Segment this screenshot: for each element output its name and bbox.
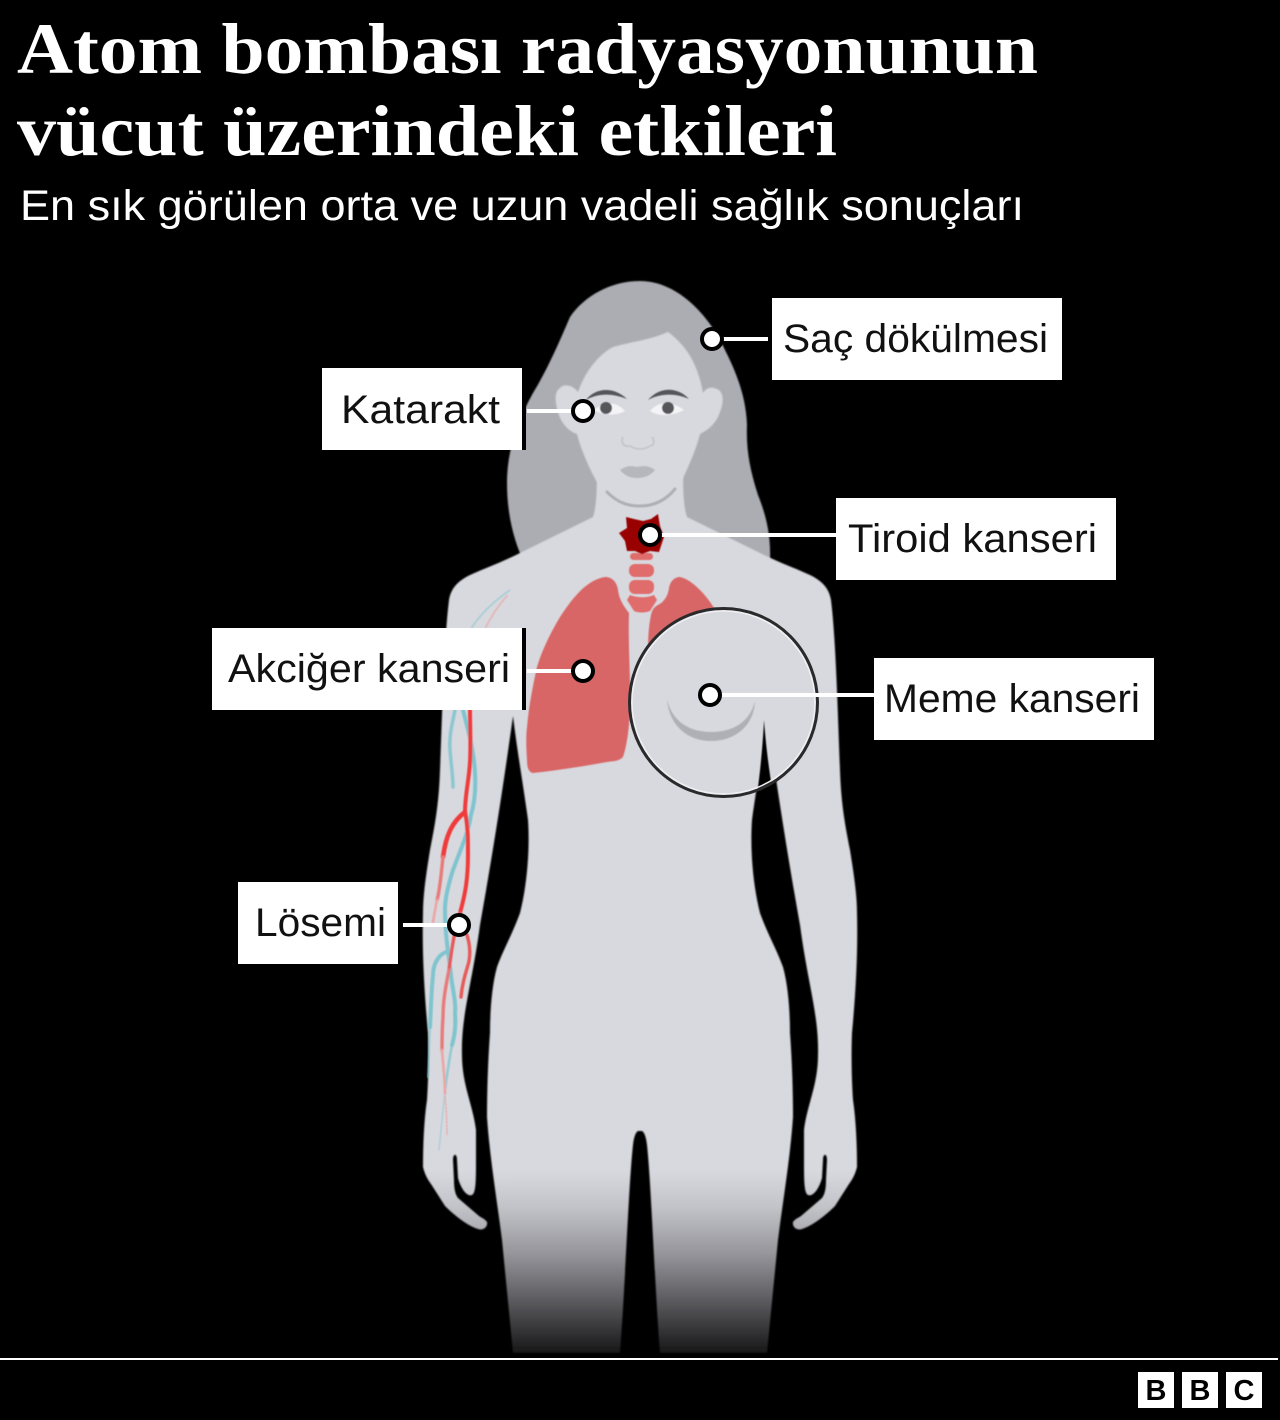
chin line	[607, 489, 675, 506]
label: Katarakt	[322, 368, 593, 450]
label: Saç dökülmesi	[702, 298, 1062, 380]
magnifier circle	[630, 608, 818, 822]
label: Akciğer kanseri	[212, 628, 593, 710]
label: Katarakt: Katarakt	[341, 388, 500, 432]
trachea	[627, 553, 657, 612]
label: Tiroid kanseri: Tiroid kanseri	[848, 517, 1097, 561]
label: Lösemi: Lösemi	[255, 901, 386, 945]
label: Lösemi	[238, 882, 469, 964]
nose	[622, 437, 654, 449]
label: Meme kanseri: Meme kanseri	[884, 677, 1140, 721]
subtitle: En sık görülen orta ve uzun vadeli sağlık sonuçları	[20, 182, 1024, 230]
thyroid	[619, 514, 664, 554]
right lung	[648, 577, 720, 650]
BBC logo: C	[1234, 1375, 1255, 1407]
mouth	[620, 466, 655, 478]
title: Atom bombası radyasyonunun	[17, 9, 1038, 89]
title	[17, 9, 1038, 171]
eyebrows	[586, 390, 689, 400]
label: Meme kanseri	[700, 658, 1154, 740]
body silhouette	[423, 470, 857, 1353]
title: vücut üzerindeki etkileri	[17, 91, 837, 171]
eyes	[594, 402, 684, 415]
veins	[428, 590, 510, 1150]
left lung	[526, 577, 630, 773]
footer rule	[0, 1358, 1278, 1360]
breast outline	[667, 699, 755, 741]
label: Akciğer kanseri: Akciğer kanseri	[228, 647, 510, 691]
label: Tiroid kanseri	[640, 498, 1116, 580]
face	[556, 332, 723, 484]
human body figure	[423, 281, 857, 1353]
faint upper arm veins	[472, 590, 510, 627]
hair	[507, 281, 770, 560]
BBC logo	[1138, 1372, 1262, 1408]
BBC logo: B	[1146, 1375, 1166, 1407]
BBC logo: B	[1190, 1375, 1210, 1407]
label: Saç dökülmesi: Saç dökülmesi	[783, 317, 1048, 361]
